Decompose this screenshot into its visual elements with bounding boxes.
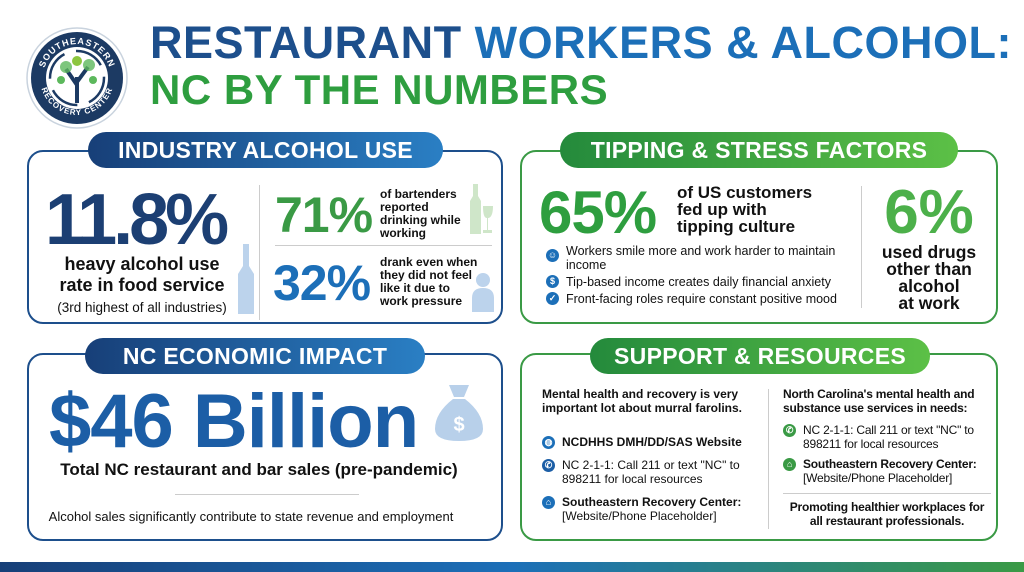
resource: center [783,457,977,485]
resource: center: [Website/Phone Placeholder] [562,509,717,523]
note: Alcohol sales significantly contribute to state revenue and employment [49,509,453,524]
bullet list [546,244,837,306]
resource: center [542,495,741,523]
heading: support & resources: SUPPORT & RESOURCES [614,343,906,369]
logo: SOUTHEASTERN [39,38,115,68]
panel: tipping & stress: of US customers [677,183,812,202]
panel: tipping & stress: other than [886,259,972,279]
title [150,17,1012,113]
bullet: check: ✓ [549,293,556,303]
title: RESTAURANT WORKERS & ALCOHOL: [150,17,1012,68]
bullet: smile: ☺ [548,250,557,260]
stat 71%: 71% [275,187,372,243]
heading: support & resources [590,338,930,374]
panel: tipping & stress: tipping culture [677,217,795,236]
footer bar [0,562,1024,572]
bullet: check: Front-facing roles require constant positive mood [566,292,837,306]
heading: industry alcohol use: INDUSTRY ALCOHOL USE [118,137,413,163]
bullet: dollar: Tip-based income creates daily financial anxiety [566,275,831,289]
heading: tipping & stress: TIPPING & STRESS FACTORS [591,137,927,163]
logo [26,27,128,129]
caption: Total NC restaurant and bar sales (pre-pandemic) [60,460,458,479]
panel: support & resources [520,353,998,541]
left column [542,387,742,523]
panel: industry alcohol use: they did not feel [380,268,472,282]
logo: RECOVERY CENTER [42,87,112,115]
icon: stressed person [472,273,494,312]
heading: industry alcohol use [88,132,443,168]
closing message: Promoting healthier workplaces for all restaurant professionals. [790,500,984,528]
resource: center: Southeastern Recovery Center: [803,457,977,471]
panel: industry alcohol use [27,150,503,324]
icon: bottle [238,244,254,314]
left column: Mental health and recovery is very important lot about murral farolins. [542,387,742,415]
panel: tipping & stress: at work [898,293,960,313]
resource: phone: ✆ [545,460,552,470]
heading: economic impact: NC ECONOMIC IMPACT [123,343,387,369]
panel: tipping & stress: fed up with [677,200,767,219]
panel: industry alcohol use: of bartenders [380,187,457,201]
panel: industry alcohol use: work pressure [380,294,462,308]
panel: industry alcohol use: drank even when [380,255,477,269]
icon: money bag: $ [453,414,465,436]
big stat $46 billion: $46 Billion [49,379,418,464]
resource: phone: NC 2-1-1: Call 211 or text "NC" to 898211 for local resources [562,458,740,486]
panel: industry alcohol use: working [380,226,426,240]
panel: industry alcohol use: like it due to [380,281,450,295]
panel: economic impact [27,353,503,541]
heading: economic impact [85,338,425,374]
stat 65%: 65% [539,179,656,246]
panel: tipping & stress [520,150,998,324]
bullet: dollar: $ [550,276,555,286]
panel: industry alcohol use: drinking while [380,213,461,227]
resource: website: ◍ [545,437,552,447]
stat caption [57,254,227,315]
bullet: smile: Workers smile more and work harder to maintain income [566,244,835,272]
right column [783,387,991,528]
stat caption: (3rd highest of all industries) [57,300,227,315]
resource: phone: NC 2-1-1: Call 211 or text "NC" to 898211 for local resources [803,423,974,451]
resource: website: NCDHHS DMH/DD/SAS Website [562,435,742,449]
resource: center: [Website/Phone Placeholder] [803,471,952,485]
panel: tipping & stress: alcohol [898,276,960,296]
icon: bottle and glass [470,184,493,234]
title: NC BY THE NUMBERS [150,66,608,113]
resource: center: ⌂ [546,497,551,507]
big stat 11.8%: 11.8% [45,180,225,260]
stat 32%: 32% [273,255,370,311]
icon: money bag [435,385,483,441]
stat 6%: 6% [884,178,974,247]
panel: tipping & stress: used drugs [882,242,976,262]
stat caption: rate in food service [59,275,225,295]
heading: tipping & stress [560,132,958,168]
resource: phone: ✆ [786,425,793,435]
stat caption: heavy alcohol use [64,254,220,274]
resource: center: ⌂ [787,459,792,469]
panel: industry alcohol use: reported [380,200,429,214]
resource: center: Southeastern Recovery Center: [562,495,741,509]
right column: North Carolina's mental health and substance use services in needs: [783,387,974,415]
